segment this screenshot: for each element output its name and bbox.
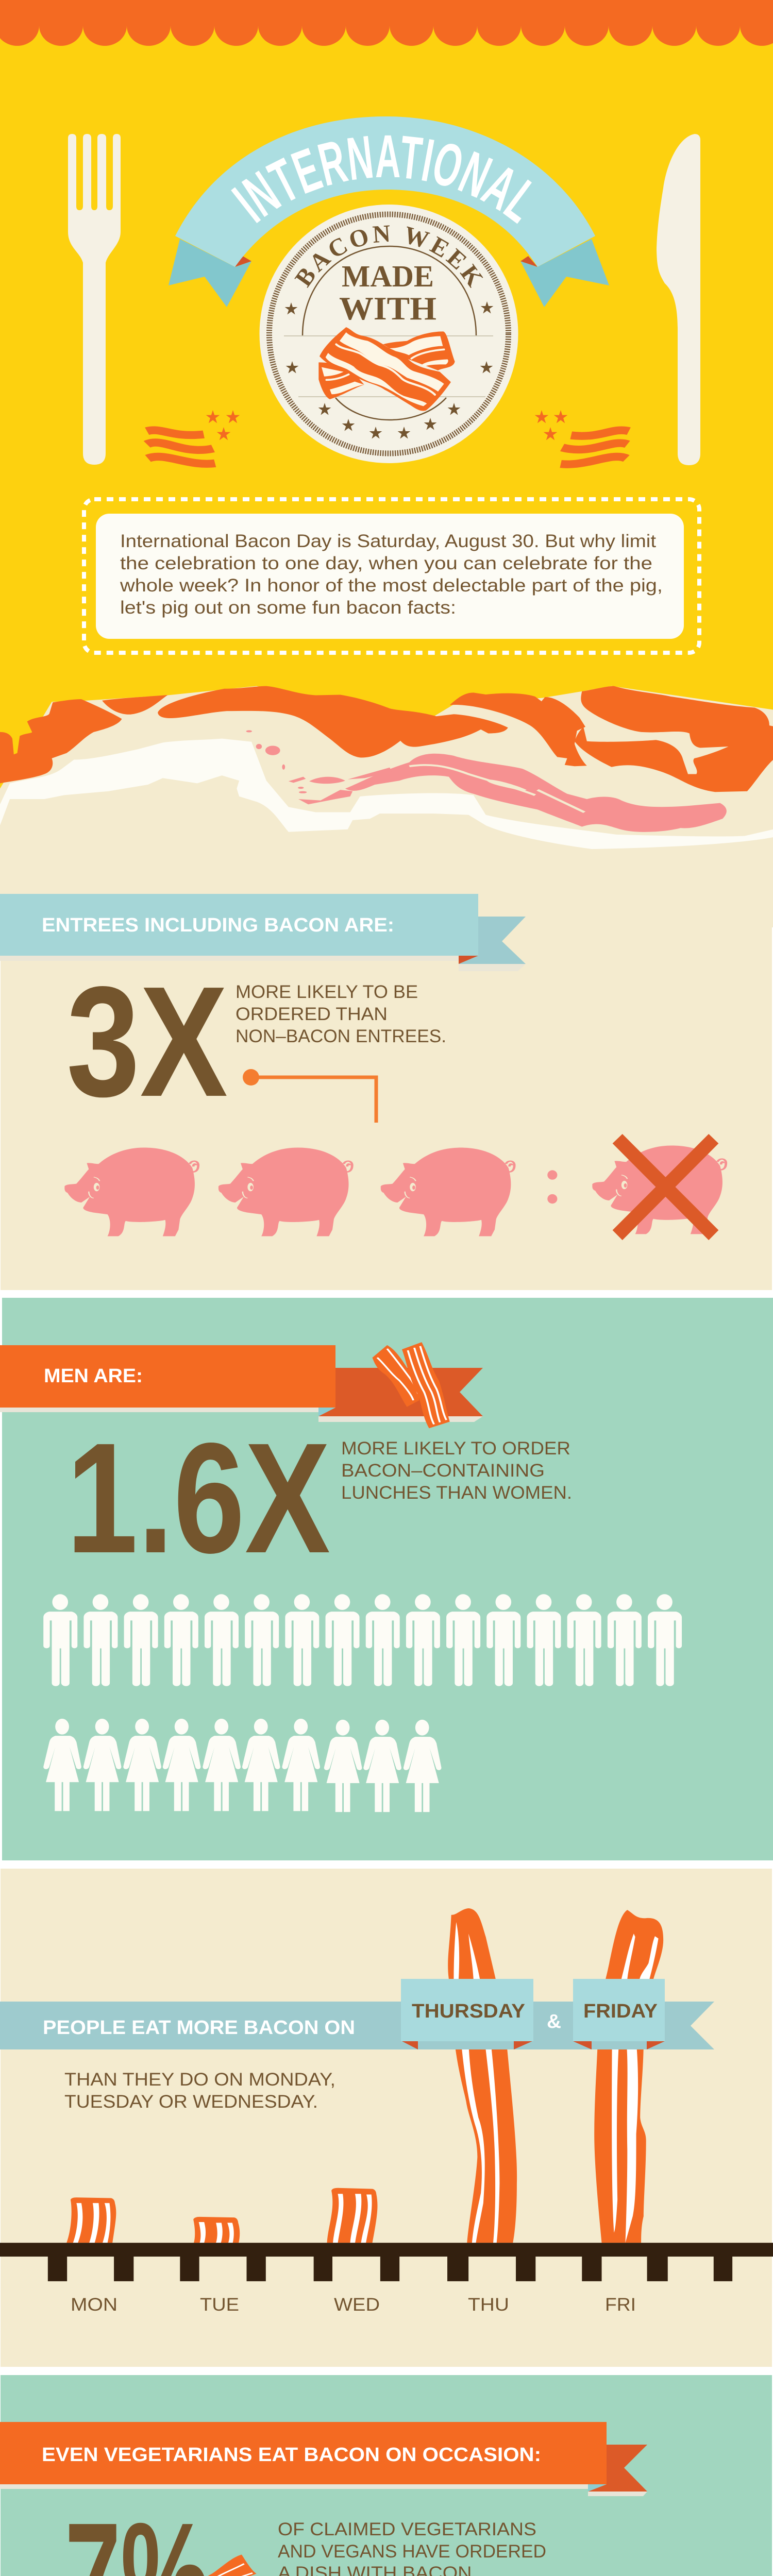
- section: vegetarians background: [1, 2375, 772, 2576]
- ribbon: entrees: [0, 894, 526, 971]
- section: entrees background: [1, 804, 772, 1290]
- text: days description: TUESDAY OR WEDNESDAY.: [64, 2092, 318, 2112]
- stat: 3X: 3X: [66, 954, 228, 1129]
- connector: [243, 1069, 376, 1123]
- icon: knife: [657, 134, 700, 465]
- axis labels: TUE: [200, 2295, 239, 2315]
- intro box: International Bacon Day is Saturday, August 30. But why limit: [120, 531, 656, 551]
- intro box: let's pig out on some fun bacon facts:: [120, 598, 456, 618]
- ribbon: vegetarians: EVEN VEGETARIANS EAT BACON ON OCCASION:: [42, 2444, 541, 2466]
- axis: [0, 2243, 773, 2281]
- text: 3X description: ORDERED THAN: [236, 1004, 388, 1024]
- intro box: the celebration to one day, when you can celebrate for the: [120, 553, 652, 573]
- icon: fork: [68, 134, 121, 465]
- badge: MADE: [342, 259, 434, 293]
- text: vegetarians description: AND VEGANS HAVE ORDERED: [278, 2541, 546, 2562]
- ribbon: men: [0, 1345, 483, 1422]
- intro box: whole week? In honor of the most delectable part of the pig,: [120, 575, 663, 596]
- ribbon: people eat more: &: [547, 2011, 561, 2032]
- text: 3X description: [236, 982, 446, 1046]
- text: days description: [64, 2070, 335, 2112]
- text: men description: MORE LIKELY TO ORDER: [341, 1438, 570, 1459]
- badge: [260, 205, 518, 463]
- pigs: [64, 1134, 726, 1240]
- icon: bacon and stars left: [147, 410, 240, 464]
- card: friday: FRIDAY: [583, 2001, 658, 2022]
- text: days description: THAN THEY DO ON MONDAY,: [64, 2070, 335, 2090]
- text: 3X description: NON–BACON ENTREES.: [236, 1026, 446, 1046]
- text: vegetarians description: OF CLAIMED VEGETARIANS: [278, 2519, 536, 2539]
- ribbon: people eat more: PEOPLE EAT MORE BACON ON: [43, 2017, 355, 2039]
- section: days background: [1, 1869, 772, 2367]
- icon: bacon and stars right: [535, 410, 629, 464]
- ribbon: men: MEN ARE:: [44, 1365, 143, 1387]
- card: thursday: [401, 1979, 533, 2049]
- chart: bacon by weekday: [66, 1908, 663, 2243]
- icon: bacon behind 7%: [149, 2554, 262, 2576]
- intro box: [84, 499, 699, 653]
- card: thursday: THURSDAY: [412, 2001, 525, 2022]
- ribbon: people eat more: [0, 2002, 714, 2049]
- pictogram: women: [43, 1719, 442, 1812]
- section: header background: [0, 0, 773, 804]
- icon: badge bacon: [318, 327, 455, 411]
- axis labels: THU: [468, 2295, 509, 2315]
- axis labels: MON: [71, 2295, 117, 2315]
- awning: [0, 0, 773, 46]
- illustration: giant bacon: [0, 686, 773, 927]
- text: men description: BACON–CONTAINING: [341, 1461, 545, 1481]
- badge: WITH: [339, 291, 436, 327]
- title ribbon: [169, 116, 609, 307]
- badge: BACON WEEK: [294, 225, 483, 288]
- axis labels: FRI: [605, 2295, 636, 2315]
- stat: 1.6X: 1.6X: [66, 1410, 331, 1586]
- pictogram: men: [43, 1594, 682, 1686]
- icon: bacon on ribbon: [373, 1342, 450, 1428]
- text: men description: [341, 1438, 572, 1503]
- section: men background: [2, 1298, 773, 1860]
- title ribbon: INTERNATIONAL: [231, 135, 532, 224]
- text: men description: LUNCHES THAN WOMEN.: [341, 1483, 572, 1503]
- text: 3X description: MORE LIKELY TO BE: [236, 982, 418, 1002]
- axis labels: WED: [334, 2295, 380, 2315]
- text: vegetarians description: [278, 2519, 546, 2576]
- card: friday: [573, 1979, 665, 2049]
- axis labels: [71, 2295, 636, 2315]
- ribbon: vegetarians: [0, 2422, 647, 2496]
- ribbon: entrees: ENTREES INCLUDING BACON ARE:: [42, 914, 394, 936]
